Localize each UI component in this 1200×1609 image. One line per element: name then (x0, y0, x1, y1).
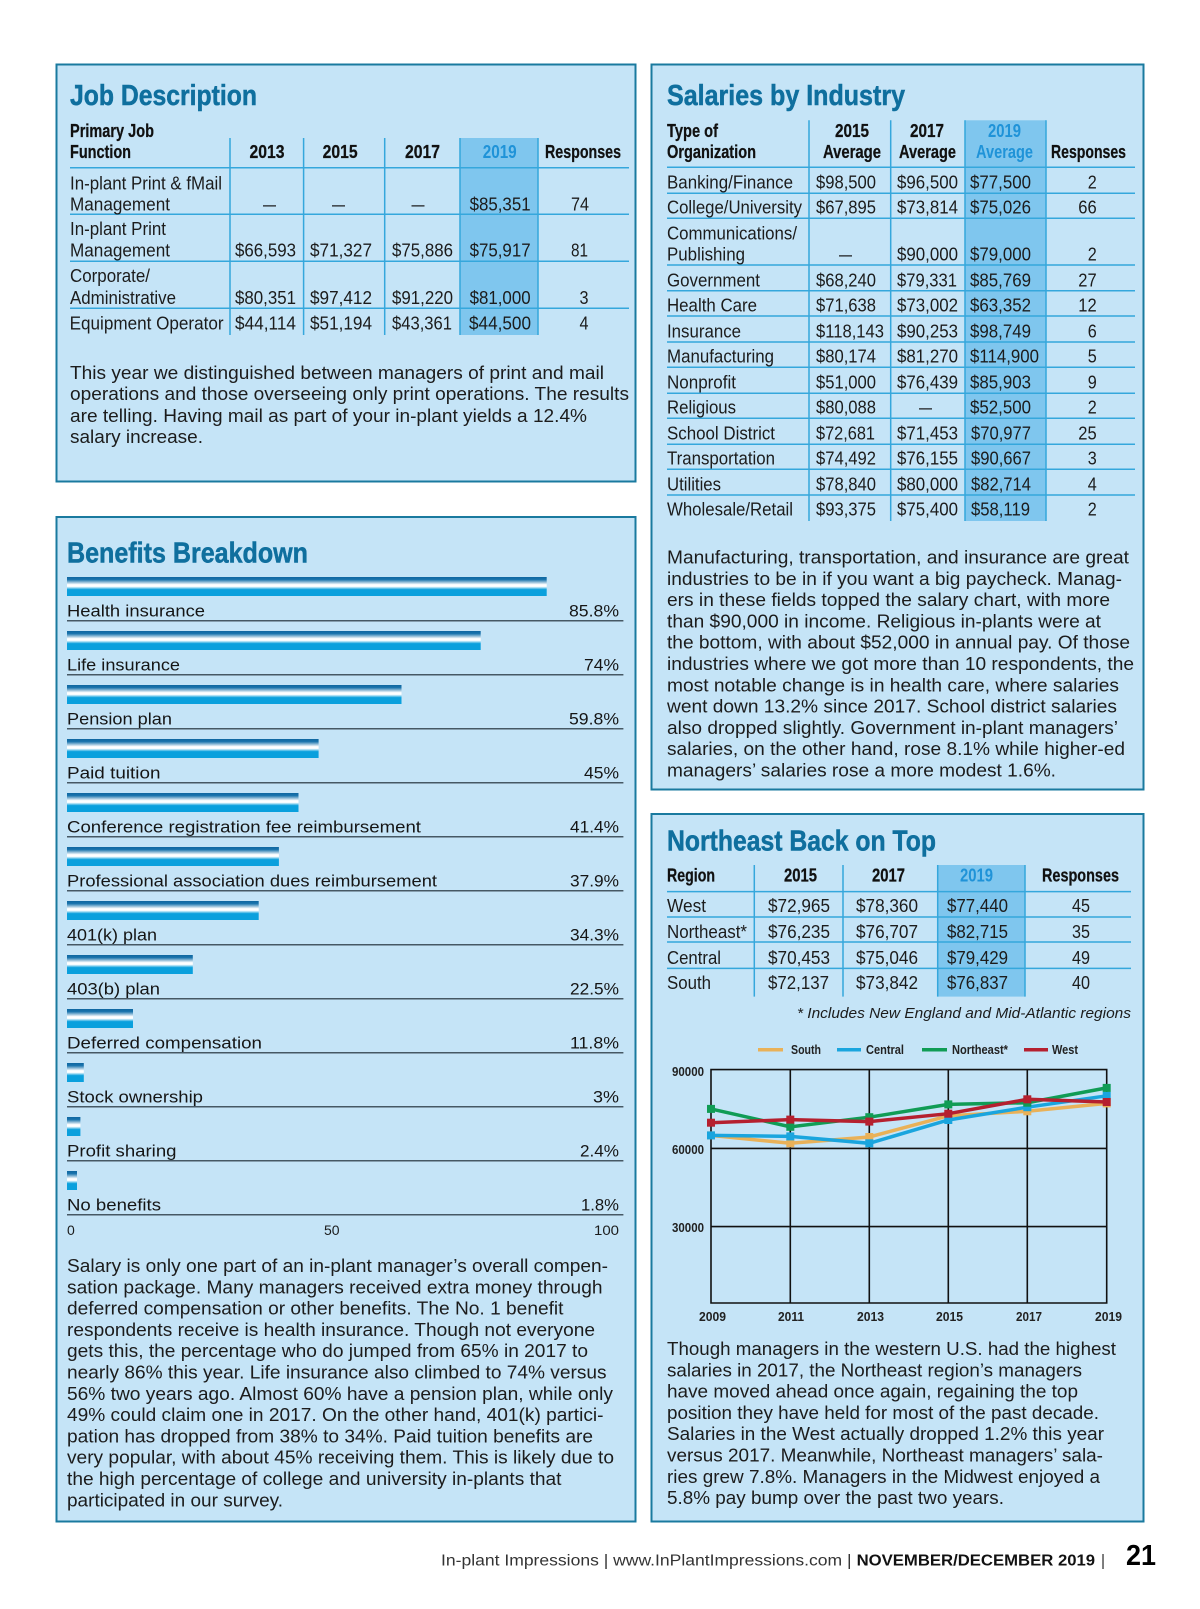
table header: Type of (667, 121, 719, 141)
panel: Northeast Back on Top (652, 814, 1144, 1522)
row: South: $73,842 (856, 972, 918, 993)
row: Government: $79,331 (897, 269, 957, 290)
row: Northeast: $76,707 (856, 921, 918, 942)
table: job function salaries (70, 121, 629, 335)
bar: 403(b) plan: 22.5% (570, 980, 619, 998)
row: Manufacturing: $81,270 (897, 346, 958, 367)
table header: 2019 (483, 142, 517, 162)
x axis labels: 2015 (936, 1309, 963, 1324)
row: Corporate/Administrative: 3 (580, 287, 588, 308)
body text: salaries by industry: managers’ salaries rose a more modest 1.6%. (667, 760, 1056, 780)
bar: Life insurance (67, 631, 623, 675)
row: Northeast: $76,235 (768, 921, 830, 942)
series: South (707, 1099, 1111, 1147)
y axis labels: 60000 (672, 1142, 704, 1157)
body text: salaries by industry: Manufacturing, transportation, and insurance are great (667, 546, 1129, 568)
body text: northeast: position they have held for most of the past decade. (667, 1402, 1099, 1423)
footer: In-plant Impressions | www.InPlantImpressions.com | (441, 1552, 852, 1570)
bar: Pension plan (67, 685, 623, 729)
row: In-plant Print Management: 81 (571, 240, 588, 260)
footer: | (1101, 1552, 1105, 1570)
y axis labels (672, 1064, 704, 1235)
row: Utilities: $80,000 (897, 474, 958, 494)
row: School District: 25 (1078, 422, 1097, 443)
row: Nonprofit: Nonprofit (667, 371, 736, 392)
row: School District: $72,681 (816, 422, 875, 443)
body text: job description: operations and those overseeing only print operations. The results (70, 383, 629, 404)
row: College/University: $73,814 (897, 197, 958, 218)
body text: job description (70, 362, 629, 447)
row: West: West (667, 895, 706, 916)
series: West (707, 1095, 1111, 1127)
row: Transportation: $76,155 (897, 447, 958, 468)
row: Government: $68,240 (816, 269, 876, 290)
bar chart: benefits (67, 577, 623, 1238)
row: South: 40 (1072, 972, 1090, 993)
bar: Profit sharing: 2.4% (580, 1142, 619, 1160)
row: Communications/Publishing: — (839, 244, 852, 265)
row: Health Care: 12 (1078, 295, 1097, 316)
row: School District (667, 422, 1097, 443)
body text: benefits: pation has dropped from 38% to 34%. Paid tuition benefits are (67, 1425, 593, 1446)
heading: Salaries by Industry: Salaries by Industry (667, 80, 905, 112)
row: Wholesale/Retail: $75,400 (897, 498, 958, 519)
row: Banking/Finance: $98,500 (816, 171, 876, 192)
row: Wholesale/Retail: $93,375 (816, 498, 876, 519)
row: Nonprofit (667, 371, 1097, 392)
body text: benefits: gets this, the percentage who do jumped from 65% in 2017 to (67, 1340, 588, 1361)
page number: 21 (1126, 1540, 1156, 1572)
line chart: regional salary trends (672, 1042, 1122, 1324)
body text: northeast: 5.8% pay bump over the past two years. (667, 1487, 1004, 1508)
row: Central: $75,046 (856, 947, 918, 968)
y axis labels: 90000 (672, 1064, 704, 1079)
row: Utilities: $78,840 (816, 474, 876, 494)
bar: Professional association dues reimbursement (67, 847, 623, 891)
row: School District: $70,977 (971, 422, 1031, 443)
row: West (667, 895, 1090, 916)
row: Religious: $52,500 (970, 396, 1031, 417)
body text: salaries by industry: ers in these fields topped the salary chart, with more (667, 589, 1110, 610)
bar: Conference registration fee reimbursement: 41.4% (570, 818, 619, 836)
row: In-plant Print and Mail Management: In-plant Print & fMail (70, 172, 222, 193)
bar: No benefits: 1.8% (581, 1196, 619, 1214)
row: Wholesale/Retail: 2 (1088, 498, 1097, 519)
body text: benefits: sation package. Many managers received extra money through (67, 1276, 602, 1297)
row: Central: $70,453 (768, 947, 830, 968)
body text: benefits: 56% two years ago. Almost 60% have a pension plan, while only (67, 1383, 614, 1404)
row: Communications/Publishing: $79,000 (970, 244, 1031, 265)
table header (667, 121, 1126, 162)
bar: Stock ownership: Stock ownership (67, 1088, 203, 1106)
table header (667, 866, 1119, 886)
table header: Average (899, 142, 956, 162)
row: Government: 27 (1078, 269, 1097, 290)
row: Central: $79,429 (947, 947, 1008, 968)
bar: Pension plan: 59.8% (569, 710, 619, 728)
body text: salaries by industry: industries where we got more than 10 respondents, the (667, 653, 1134, 674)
row: Corporate/Administrative: $80,351 (235, 287, 296, 308)
row: Equipment Operator: $44,500 (469, 312, 531, 333)
row: Insurance: Insurance (667, 321, 741, 342)
body text: benefits: the high percentage of college and university in-plants that (67, 1468, 562, 1489)
row: Health Care: $63,352 (970, 295, 1031, 316)
body text: salaries by industry: industries to be in if you want a big paycheck. Manag- (667, 568, 1122, 589)
table header: 2019 (988, 121, 1021, 141)
chart legend: Northeast* (952, 1042, 1009, 1057)
body text: salaries by industry: went down 13.2% since 2017. School district salaries (666, 696, 1117, 717)
row: Northeast (667, 921, 1090, 942)
heading: Benefits Breakdown: Benefits Breakdown (67, 537, 308, 569)
row: Religious: Religious (667, 396, 736, 417)
table header: 2013 (250, 142, 284, 162)
body text: benefits: very popular, with about 45% receiving them. This is likely due to (67, 1447, 614, 1468)
body text: job description: are telling. Having mail as part of your in-plant yields a 12.4% (70, 405, 587, 426)
row: Utilities: Utilities (667, 474, 721, 494)
row: Insurance (667, 321, 1097, 342)
row: In-plant Print Management: $71,327 (310, 240, 372, 260)
chart axis labels (67, 1222, 619, 1238)
table header (70, 121, 621, 162)
bar: Profit sharing (67, 1117, 623, 1161)
bar: Professional association dues reimbursement: 37.9% (570, 872, 619, 890)
row: Health Care: Health Care (667, 295, 757, 316)
bar: 403(b) plan: 403(b) plan (67, 980, 160, 998)
row: Transportation (667, 447, 1097, 468)
row: Banking/Finance (667, 171, 1097, 192)
x axis labels: 2009 (699, 1309, 726, 1324)
chart legend: South (791, 1042, 821, 1057)
row: In-plant Print Management: $66,593 (235, 240, 296, 260)
row: Nonprofit: 9 (1088, 371, 1097, 392)
row: Government: Government (667, 269, 760, 290)
panel: Job Description (56, 64, 636, 482)
table header: 2019 (960, 866, 993, 886)
row: Equipment Operator: $43,361 (392, 312, 452, 333)
table header: Region (667, 866, 715, 886)
row: West: $77,440 (947, 895, 1008, 916)
chart legend: Central (866, 1042, 904, 1057)
table header: 2017 (872, 866, 905, 886)
table header: Organization (667, 142, 756, 162)
table header: 2015 (835, 121, 869, 141)
bar: Pension plan: Pension plan (67, 710, 172, 728)
table header: 2015 (784, 866, 817, 886)
row: Health Care (667, 295, 1097, 316)
row: Nonprofit: $76,439 (897, 371, 958, 392)
row: In-plant Print and Mail Management (70, 172, 589, 214)
row: Utilities: 4 (1088, 474, 1097, 494)
bar: Conference registration fee reimbursement: Conference registration fee reimbursement (67, 818, 421, 836)
bar: Health insurance: Health insurance (67, 602, 205, 620)
bar: Deferred compensation: 11.8% (570, 1034, 619, 1052)
row: Central: Central (667, 947, 721, 968)
row: Transportation: $74,492 (816, 447, 876, 468)
row: Insurance: $90,253 (897, 321, 958, 342)
row: Transportation: $90,667 (971, 447, 1031, 468)
row: Corporate/Administrative (70, 265, 588, 308)
row: College/University: $67,895 (816, 197, 876, 218)
bar: Profit sharing: Profit sharing (67, 1142, 176, 1160)
row: Wholesale/Retail (667, 498, 1097, 519)
row: Health Care: $73,002 (897, 295, 958, 316)
row: Northeast: $82,715 (947, 921, 1008, 942)
bar: 401(k) plan: 401(k) plan (67, 926, 157, 944)
bar: 403(b) plan (67, 955, 623, 999)
table: salaries by organization type (667, 120, 1135, 521)
row: In-plant Print and Mail Management: 74 (571, 193, 589, 214)
panel: Benefits Breakdown (56, 517, 636, 1522)
body text: benefits: participated in our survey. (67, 1489, 283, 1510)
row: Banking/Finance: 2 (1088, 171, 1097, 192)
row: School District: $71,453 (897, 422, 958, 443)
row: College/University: 66 (1078, 197, 1097, 218)
body text: salaries by industry (666, 546, 1134, 780)
body text: northeast: Salaries in the West actually dropped 1.2% this year (667, 1423, 1104, 1444)
chart axis labels: 0 (67, 1222, 75, 1238)
body text: salaries by industry: the bottom, with about $52,000 in annual pay. Of those (667, 632, 1130, 653)
x axis labels: 2013 (857, 1309, 884, 1324)
body text: northeast: versus 2017. Meanwhile, Northeast managers’ sala- (667, 1444, 1103, 1466)
bar: Paid tuition (67, 739, 623, 783)
bar: Life insurance: 74% (584, 656, 619, 674)
row: Nonprofit: $51,000 (816, 371, 876, 392)
chart legend (758, 1042, 1079, 1057)
table header: 2017 (405, 142, 440, 162)
x axis labels (699, 1309, 1122, 1324)
body text: benefits (67, 1255, 614, 1510)
row: Manufacturing: Manufacturing (667, 346, 774, 367)
body text: salaries by industry: than $90,000 in income. Religious in-plants were at (667, 610, 1101, 631)
row: Corporate/Administrative: $91,220 (392, 287, 453, 308)
row: West: 45 (1072, 895, 1090, 916)
row: In-plant Print and Mail Management: — (263, 193, 276, 214)
row: Corporate/Administrative: Administrative (70, 287, 176, 308)
row: Religious: $80,088 (816, 396, 876, 417)
body text: benefits: nearly 86% this year. Life insurance also climbed to 74% versus (67, 1362, 607, 1382)
row: In-plant Print and Mail Management: — (412, 193, 425, 214)
row: In-plant Print and Mail Management: Management (70, 193, 170, 214)
row: In-plant Print Management: Management (70, 240, 170, 260)
row: Communications/Publishing: Communications/ (667, 222, 798, 243)
row: Banking/Finance: $96,500 (897, 171, 958, 192)
row: Northeast: 35 (1072, 921, 1090, 942)
row: Central: 49 (1072, 947, 1090, 968)
row: Utilities (667, 474, 1097, 494)
row: In-plant Print and Mail Management: — (332, 193, 345, 214)
footer: NOVEMBER/DECEMBER 2019 (857, 1552, 1096, 1570)
panel: Salaries by Industry (652, 64, 1144, 790)
row: Manufacturing: $114,900 (970, 346, 1039, 367)
body text: benefits: deferred compensation or other benefits. The No. 1 benefit (67, 1298, 564, 1319)
table header: Primary Job (70, 121, 154, 141)
chart axis labels: 100 (594, 1222, 619, 1238)
x axis labels: 2011 (778, 1309, 804, 1324)
row: Equipment Operator: 4 (580, 312, 588, 333)
table header: 2017 (910, 121, 944, 141)
row: South: $72,137 (768, 972, 829, 993)
row: Communications/Publishing: 2 (1088, 244, 1097, 265)
row: College/University: College/University (667, 197, 803, 218)
row: Manufacturing (667, 346, 1097, 367)
table header: Average (976, 142, 1033, 162)
row: Religious: — (919, 396, 932, 417)
chart axis labels: 50 (324, 1222, 340, 1238)
row: In-plant Print Management: In-plant Print (70, 218, 166, 239)
body text: northeast: ries grew 7.8%. Managers in the Midwest enjoyed a (667, 1466, 1101, 1487)
body text: benefits: Salary is only one part of an in-plant manager’s overall compen- (67, 1255, 608, 1276)
table header: Responses (1051, 142, 1126, 162)
row: Manufacturing: 5 (1088, 346, 1097, 367)
row: Central (667, 947, 1090, 968)
row: School District: School District (667, 422, 775, 443)
body text: northeast: salaries in 2017, the Northeast region’s managers (667, 1359, 1082, 1380)
table: regional salaries (667, 865, 1131, 997)
row: South (667, 972, 1090, 993)
row: South: South (667, 972, 711, 993)
row: Corporate/Administrative: $97,412 (310, 287, 372, 308)
row: Nonprofit: $85,903 (970, 371, 1031, 392)
footnote: * Includes New England and Mid-Atlantic regions (797, 1005, 1132, 1022)
row: Manufacturing: $80,174 (816, 346, 876, 367)
row: Equipment Operator: $44,114 (235, 312, 296, 333)
row: Transportation: Transportation (667, 447, 775, 468)
chart grid (711, 1070, 1107, 1303)
bar: Deferred compensation (67, 1009, 623, 1053)
series: Northeast (707, 1084, 1111, 1131)
row: Utilities: $82,714 (971, 474, 1031, 494)
row: In-plant Print Management: $75,917 (470, 240, 531, 260)
row: Corporate/Administrative: Corporate/ (70, 265, 151, 286)
bar: No benefits: No benefits (67, 1196, 161, 1214)
body text: job description: salary increase. (70, 426, 203, 447)
body text: northeast: Though managers in the western U.S. had the highest (667, 1338, 1116, 1359)
bar: 401(k) plan: 34.3% (570, 926, 619, 944)
row: Equipment Operator (70, 312, 589, 333)
row: In-plant Print Management: $75,886 (392, 240, 453, 260)
body text: northeast: have moved ahead once again, regaining the top (667, 1381, 1078, 1402)
row: Northeast: Northeast* (667, 921, 747, 942)
row: In-plant Print Management (70, 218, 588, 260)
bar: Paid tuition: 45% (584, 764, 619, 782)
x axis labels: 2017 (1016, 1309, 1042, 1324)
bar: Conference registration fee reimbursement (67, 793, 623, 837)
row: Health Care: $71,638 (816, 295, 876, 316)
series: Central (707, 1092, 1111, 1147)
bar: Health insurance (67, 577, 623, 621)
heading: Northeast Back on Top: Northeast Back on Top (667, 826, 936, 858)
body text: salaries by industry: most notable change is in health care, where salaries (667, 674, 1119, 695)
x axis labels: 2019 (1095, 1309, 1122, 1324)
table header: Function (70, 142, 131, 162)
heading: Job Description: Job Description (70, 80, 257, 112)
row: Religious: 2 (1088, 396, 1097, 417)
row: Corporate/Administrative: $81,000 (470, 287, 531, 308)
body text: benefits: respondents receive is health insurance. Though not everyone (67, 1319, 595, 1340)
row: Communications/Publishing: $90,000 (897, 244, 958, 265)
row: College/University: $75,026 (970, 197, 1031, 218)
body text: job description: This year we distinguished between managers of print and mail (70, 362, 604, 383)
row: Insurance: 6 (1088, 321, 1097, 342)
bar: Stock ownership (67, 1063, 623, 1107)
row: Religious (667, 396, 1097, 417)
row: Equipment Operator: $51,194 (310, 312, 372, 333)
body text: benefits: 49% could claim one in 2017. On the other hand, 401(k) partici- (67, 1404, 604, 1425)
row: West: $72,965 (768, 895, 830, 916)
row: Banking/Finance: $77,500 (970, 171, 1031, 192)
row: Equipment Operator: Equipment Operator (70, 312, 224, 333)
row: Insurance: $118,143 (816, 321, 884, 342)
table header: Responses (1042, 866, 1119, 886)
row: College/University (667, 197, 1097, 218)
row: South: $76,837 (947, 972, 1008, 993)
y axis labels: 30000 (672, 1220, 704, 1235)
body text: northeast (667, 1338, 1116, 1508)
row: Wholesale/Retail: Wholesale/Retail (667, 498, 793, 519)
table header: Average (823, 142, 881, 162)
row: Communications/Publishing: Publishing (667, 244, 745, 265)
row: In-plant Print and Mail Management: $85,351 (470, 193, 531, 214)
row: Communications/Publishing (667, 222, 1097, 265)
table header: Responses (545, 142, 621, 162)
bar: Stock ownership: 3% (593, 1088, 619, 1106)
bar: No benefits (67, 1171, 623, 1215)
row: Transportation: 3 (1088, 447, 1097, 468)
row: Government: $85,769 (970, 269, 1031, 290)
row: Wholesale/Retail: $58,119 (971, 498, 1030, 519)
bar: Professional association dues reimbursement: Professional association dues reimbursement (67, 872, 437, 890)
bar: Paid tuition: Paid tuition (67, 764, 160, 782)
chart legend: West (1052, 1042, 1079, 1057)
footer (441, 1540, 1156, 1572)
bar: Health insurance: 85.8% (569, 602, 619, 620)
body text: salaries by industry: salaries, on the other hand, rose 8.1% while higher-ed (667, 738, 1125, 759)
bar: 401(k) plan (67, 901, 623, 945)
bar: Life insurance: Life insurance (67, 656, 180, 674)
row: West: $78,360 (856, 895, 918, 916)
row: Banking/Finance: Banking/Finance (667, 171, 793, 192)
table header: 2015 (323, 142, 358, 162)
row: Government (667, 269, 1097, 290)
row: Insurance: $98,749 (970, 321, 1031, 342)
bar: Deferred compensation: Deferred compensation (67, 1034, 262, 1052)
body text: salaries by industry: also dropped slightly. Government in-plant managers’ (667, 717, 1118, 738)
